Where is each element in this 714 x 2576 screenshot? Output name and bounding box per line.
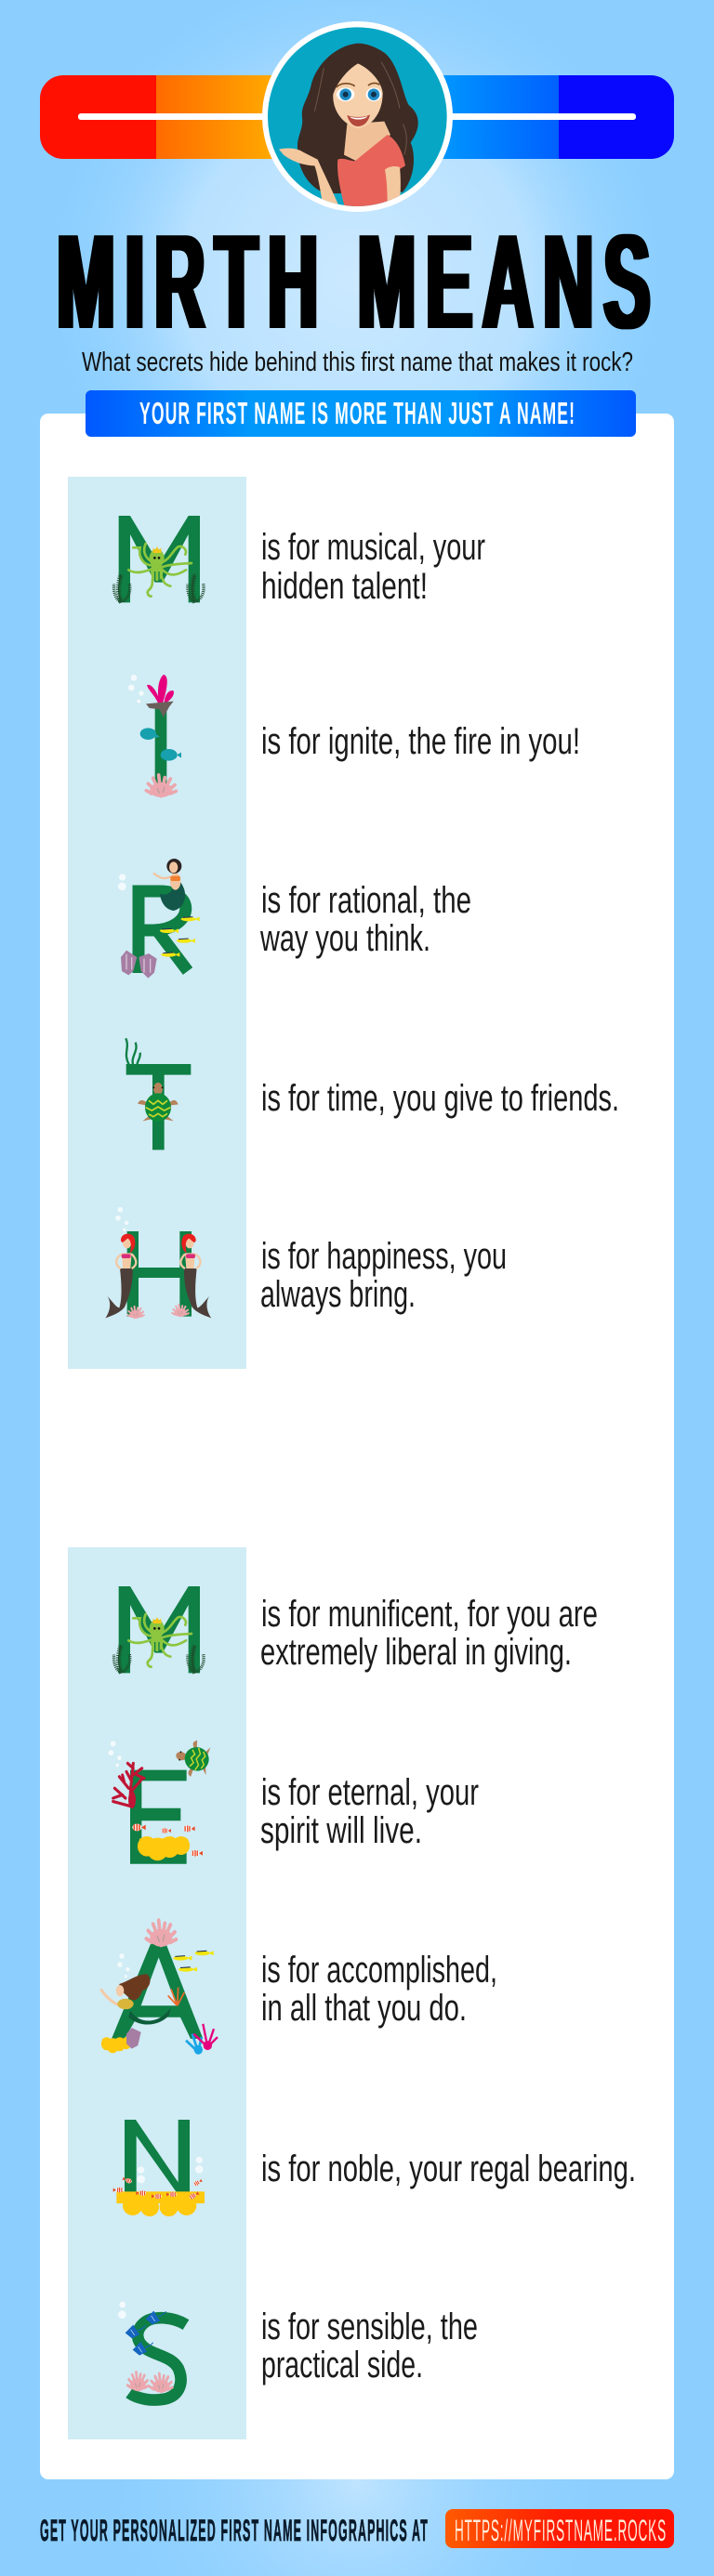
text: R xyxy=(259,880,471,959)
letter H xyxy=(105,1207,211,1319)
text: S: is for sensible, the xyxy=(261,2307,478,2347)
panel: MIRTH column xyxy=(68,477,246,1369)
text: E: spirit will live. xyxy=(260,1810,422,1851)
text: A: is for accomplished, xyxy=(261,1950,497,1991)
text: M xyxy=(261,527,485,607)
text: E xyxy=(260,1772,479,1851)
title: MIRTH MEANS xyxy=(57,207,660,357)
text: M second xyxy=(260,1594,598,1673)
letter I xyxy=(128,675,181,797)
text: M second: is for munificent, for you are xyxy=(261,1594,598,1635)
text: A: in all that you do. xyxy=(261,1988,467,2029)
text: S: practical side. xyxy=(261,2345,423,2385)
tagline pill xyxy=(86,390,636,437)
text: M: is for musical, your xyxy=(261,527,485,568)
white content panel xyxy=(40,414,674,2479)
panel: MEANS column xyxy=(68,1547,246,2439)
header banner xyxy=(40,75,674,159)
letter R xyxy=(118,859,200,979)
letter M xyxy=(114,1586,204,1673)
letter S xyxy=(118,2302,186,2400)
text: A xyxy=(261,1950,497,2029)
text: M second: extremely liberal in giving. xyxy=(260,1632,572,1673)
text: H xyxy=(260,1236,507,1315)
avatar portrait xyxy=(262,21,453,212)
letter A xyxy=(100,1920,218,2055)
letter E xyxy=(109,1737,212,1864)
text: R: way you think. xyxy=(259,918,430,959)
letter T xyxy=(126,1038,191,1150)
text: S xyxy=(261,2307,478,2385)
text: H: always bring. xyxy=(260,1274,416,1315)
letter N xyxy=(113,2120,205,2216)
text: E: is for eternal, your xyxy=(261,1772,479,1813)
text: I: is for ignite, the fire in you! xyxy=(261,721,580,762)
text: R: is for rational, the xyxy=(261,880,471,921)
letter M xyxy=(114,516,204,602)
text: M: hidden talent! xyxy=(261,566,428,607)
text: H: is for happiness, you xyxy=(261,1236,507,1277)
